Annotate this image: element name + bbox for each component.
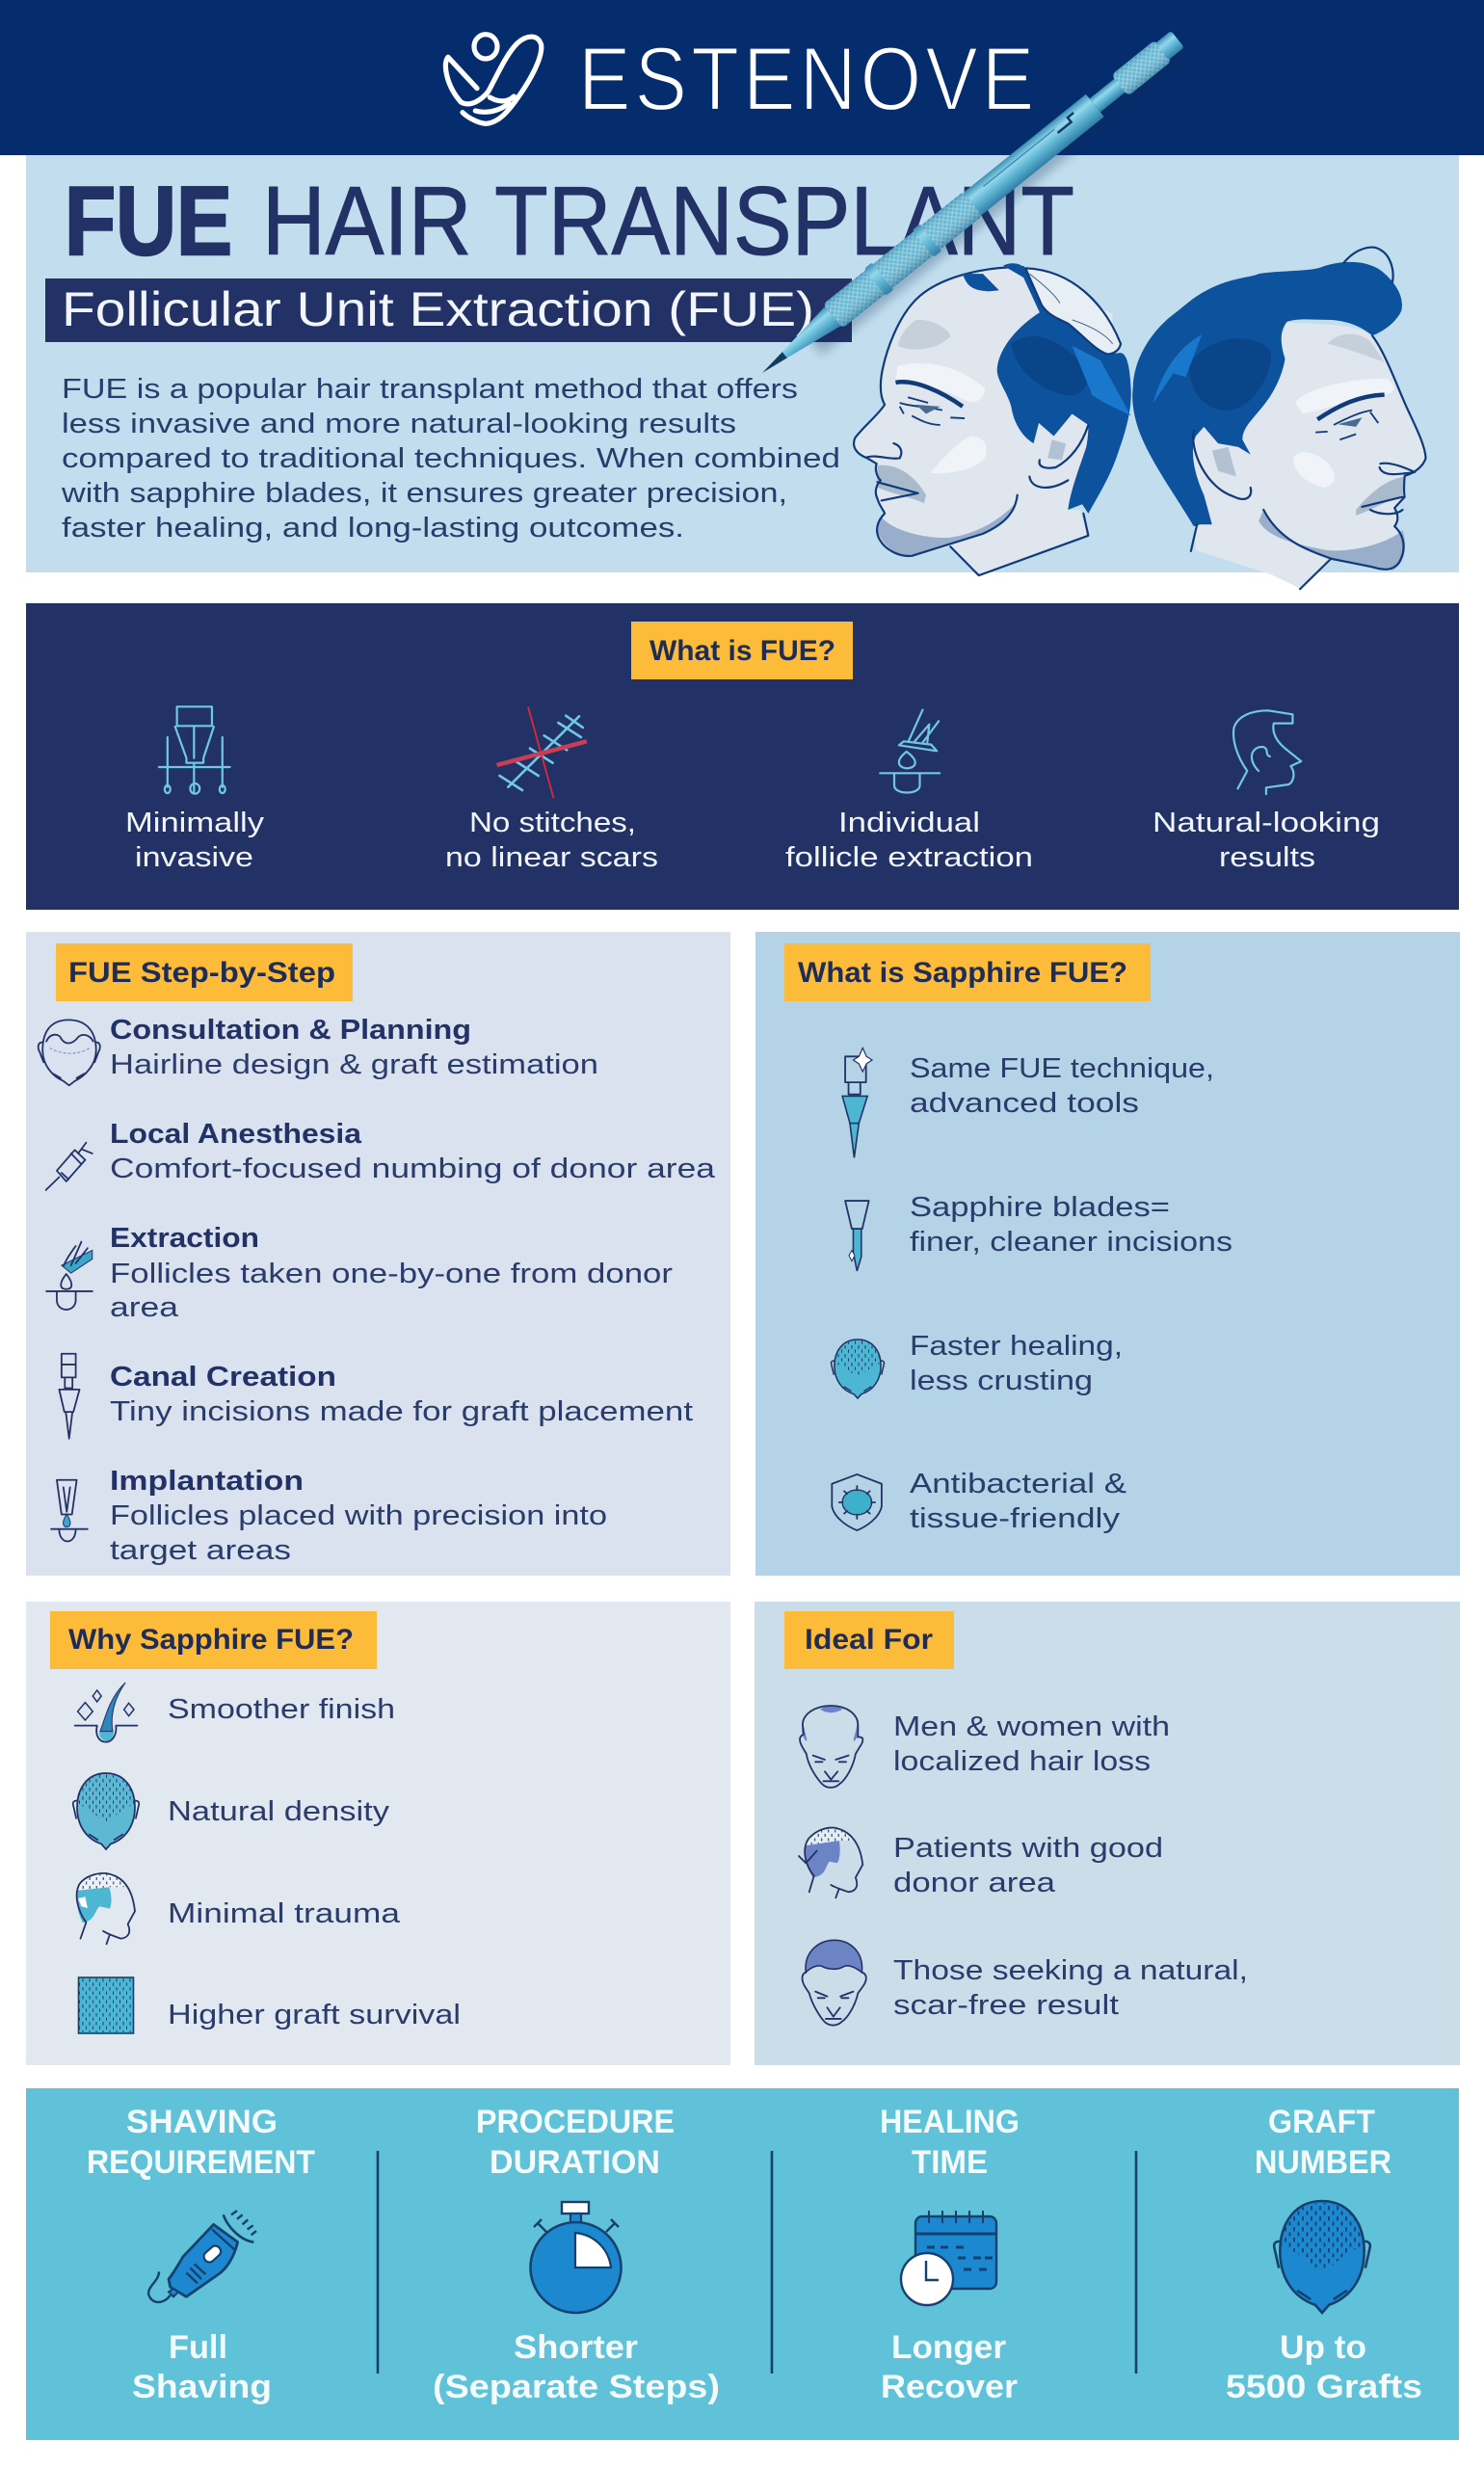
column: healing time: TIME [912,2144,988,2181]
icon: implanter [51,1480,88,1541]
heading badge [784,1611,954,1669]
column: shaving requirement: Full [169,2329,227,2366]
icon: crossed out stitches [497,706,587,798]
icon: head with grafts [1274,2201,1370,2313]
item: faster healing [832,1331,1123,1398]
intro paragraph [61,374,840,544]
item: follicle extraction: follicle extraction [785,842,1033,873]
heading badge [50,1611,377,1669]
item: natural-looking results [1153,808,1380,873]
icon: profile with donor area [77,1873,135,1944]
step 1 consultation: Hairline design & graft estimation [110,1049,598,1080]
step 3 extraction: Follicles taken one-by-one from donor [110,1259,673,1289]
subtitle bar: Follicular Unit Extraction (FUE) [62,282,814,336]
item: natural density [73,1773,390,1849]
intro paragraph: faster healing, and long-lasting outcomes. [62,513,684,544]
item: natural density: Natural density [168,1796,390,1827]
intro paragraph: less invasive and more natural-looking results [62,409,736,439]
column: procedure duration: Shorter [514,2329,638,2366]
column: procedure duration: (Separate Steps) [433,2369,720,2405]
panel: Ideal For [755,1602,1460,2065]
column: shaving requirement: Shaving [132,2369,272,2405]
icon: head top dense [832,1340,884,1398]
item: smoother finish [75,1683,395,1742]
column: healing time [880,2104,1020,2405]
item: smoother finish: Smoother finish [168,1694,395,1725]
intro paragraph: compared to traditional techniques. When combined [62,443,840,474]
icon: balding face [800,1706,862,1788]
item: sapphire blades [845,1192,1232,1271]
panel: comparison summary [26,2088,1459,2440]
icon: blade tool [159,706,230,794]
column: graft number [1226,2104,1422,2405]
column: healing time: HEALING [880,2104,1020,2140]
icon: canal blade [59,1354,80,1439]
item: natural-looking results: Natural-looking [1153,808,1380,838]
item: no stitches: No stitches, [469,808,636,838]
column: procedure duration: DURATION [490,2144,660,2181]
column: shaving requirement [87,2104,315,2405]
step 5 implantation [51,1466,607,1566]
column: healing time: Longer [891,2329,1006,2366]
icon: hair clipper [148,2211,256,2302]
column: procedure duration [433,2104,720,2405]
item: same technique: advanced tools [910,1088,1139,1119]
item: antibacterial: tissue-friendly [910,1503,1121,1534]
item: follicle extraction: Individual [838,808,980,838]
step 4 canal creation: Tiny incisions made for graft placement [110,1396,693,1427]
step 3 extraction [46,1223,673,1323]
heading badge: What is Sapphire FUE? [798,957,1127,989]
item: good donor area [799,1828,1163,1898]
panel: Why Sapphire FUE? [26,1602,730,2065]
step 4 canal creation [59,1354,693,1439]
item: minimal trauma: Minimal trauma [168,1898,401,1929]
item: follicle extraction [785,808,1033,873]
item: no stitches [445,808,658,873]
item: no stitches: no linear scars [445,842,658,873]
step 4 canal creation: Canal Creation [110,1362,336,1393]
icon: Estenove logo mark [445,35,542,123]
icon: head with hairline [39,1020,100,1085]
icon: profile with donor area [799,1828,862,1897]
column: healing time: Recover [881,2369,1018,2405]
item: antibacterial [832,1469,1126,1534]
item: sapphire blades: finer, cleaner incisions [910,1227,1232,1258]
step 3 extraction: area [110,1292,179,1323]
icon: graft density patch [79,1977,133,2033]
illustration: full hair head profile [1132,248,1426,589]
heading badge [56,943,353,1001]
panel: hero introduction [26,155,1459,589]
item: minimally invasive [125,808,265,873]
heading badge: What is FUE? [649,635,835,667]
step 1 consultation: Consultation & Planning [110,1015,471,1046]
panel: What is Sapphire FUE? [755,932,1460,1576]
column: shaving requirement: REQUIREMENT [87,2144,315,2181]
item: same technique [842,1048,1214,1157]
column: graft number: NUMBER [1255,2144,1391,2181]
item: natural-looking results: results [1219,842,1315,873]
item: minimally invasive: Minimally [125,808,265,838]
step 2 local anesthesia [46,1119,716,1190]
step 3 extraction: Extraction [110,1223,259,1254]
icon: calendar and clock [901,2211,996,2305]
step 2 local anesthesia: Comfort-focused numbing of donor area [110,1154,716,1184]
header band [0,0,1484,155]
column: graft number: 5500 Grafts [1226,2369,1422,2405]
column: procedure duration: PROCEDURE [476,2104,675,2140]
item: same technique: Same FUE technique, [910,1053,1214,1084]
item: faster healing: less crusting [910,1366,1093,1396]
item: localized hair loss: Men & women with [893,1711,1170,1742]
heading badge: Ideal For [805,1624,933,1656]
item: natural scar-free result: Those seeking a natural, [893,1955,1248,1986]
column: graft number: GRAFT [1268,2104,1375,2140]
title: FUE [65,168,232,276]
item: minimally invasive: invasive [135,842,253,873]
icon: head profile [1233,710,1301,794]
panel: What is FUE? [26,603,1459,910]
intro paragraph: with sapphire blades, it ensures greater precision, [61,478,787,509]
icon: follicle brush [46,1242,93,1310]
item: higher graft survival: Higher graft survival [168,2000,461,2030]
column: shaving requirement: SHAVING [126,2104,278,2140]
icon: dense head [73,1773,139,1849]
brand name: ESTENOVE [578,28,1038,129]
heading badge: Why Sapphire FUE? [68,1624,354,1656]
heading badge [631,622,853,679]
item: natural scar-free result: scar-free result [893,1990,1119,2021]
step 2 local anesthesia: Local Anesthesia [110,1119,362,1150]
intro paragraph: FUE is a popular hair transplant method that offers [62,374,798,405]
subtitle bar [45,279,852,342]
item: sapphire blades: Sapphire blades= [910,1192,1170,1223]
step 5 implantation: target areas [110,1535,291,1566]
step 5 implantation: Implantation [110,1466,304,1497]
illustration: balding head profile [854,263,1131,575]
item: localized hair loss: localized hair loss [893,1746,1151,1777]
item: good donor area: Patients with good [893,1833,1163,1864]
icon: sapphire tool [842,1048,872,1157]
item: antibacterial: Antibacterial & [910,1469,1126,1499]
illustration: sapphire FUE pen [752,25,1192,391]
item: good donor area: donor area [893,1868,1056,1898]
icon: stopwatch [530,2202,621,2313]
icon: face with full hair [802,1940,866,2026]
item: natural scar-free result [802,1940,1248,2026]
title: HAIR TRANSPLANT [262,168,1074,276]
heading badge [784,943,1151,1001]
item: faster healing: Faster healing, [910,1331,1123,1362]
icon: sapphire blade [845,1201,869,1271]
panel: FUE step-by-step [26,932,730,1576]
step 1 consultation [39,1015,598,1085]
item: localized hair loss [800,1706,1170,1788]
item: minimal trauma [77,1873,401,1944]
step 5 implantation: Follicles placed with precision into [110,1500,607,1531]
icon: hair follicle with sparkles [75,1683,137,1742]
item: higher graft survival [79,1977,461,2033]
icon: shield with virus [832,1474,882,1530]
icon: syringe [46,1143,93,1190]
icon: follicle extraction [880,710,940,792]
heading badge: FUE Step-by-Step [68,957,335,989]
column: graft number: Up to [1280,2329,1366,2366]
